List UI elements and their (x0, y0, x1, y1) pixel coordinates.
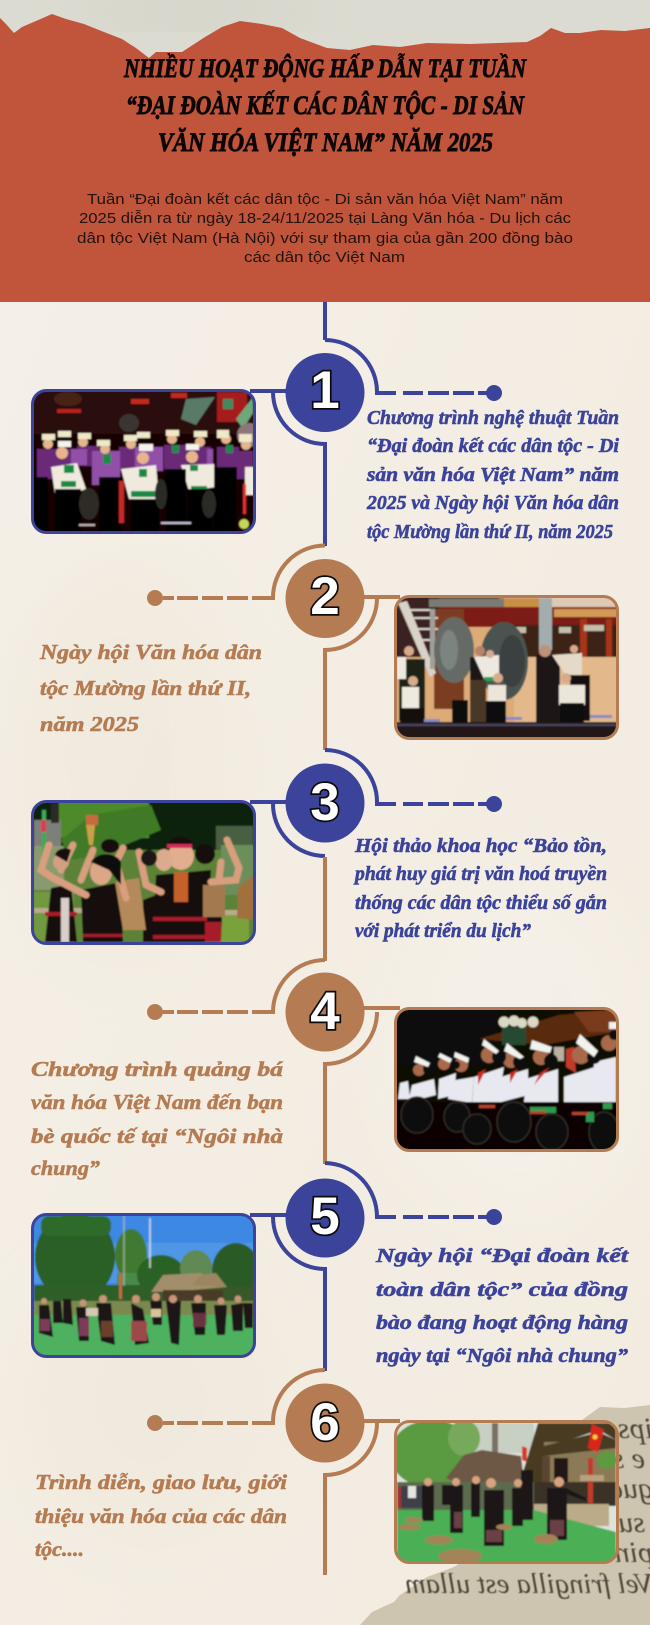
connector lines step 5 (250, 1163, 488, 1371)
text step 3: phát huy giá trị văn hoá truyền (353, 863, 607, 885)
text step 1: “Đại đoàn kết các dân tộc - Di (367, 435, 619, 457)
torn paper corner with mirrored text: e s (612, 1442, 645, 1475)
header band (0, 14, 650, 302)
text step 1: 2025 và Ngày hội Văn hóa dân (366, 492, 619, 514)
icon: dot step 6 (147, 1415, 163, 1431)
torn paper corner with mirrored text: sus (607, 1506, 645, 1539)
icon: dot step 3 (486, 796, 502, 812)
intro text: Tuần “Đại đoàn kết các dân tộc - Di sản văn hóa Việt Nam” năm (87, 191, 563, 208)
number circle 2: 2 (310, 567, 340, 626)
title: VĂN HÓA VIỆT NAM” NĂM 2025 (158, 128, 493, 157)
text step 3: với phát triển du lịch” (355, 920, 531, 942)
text step 4 (31, 1057, 284, 1180)
spine top (323, 302, 327, 340)
text step 2: năm 2025 (40, 712, 139, 736)
number circle 5: 5 (310, 1187, 340, 1246)
step 2 (39, 546, 619, 750)
photo 6: dancers by the stilt house (390, 1420, 619, 1565)
intro text: 2025 diễn ra từ ngày 18-24/11/2025 tại Làng Văn hóa - Du lịch các (79, 210, 572, 227)
number circle 2 (286, 559, 364, 638)
icon: dot step 5 (486, 1209, 502, 1225)
icon: dot step 2 (147, 590, 163, 606)
intro text: các dân tộc Việt Nam (244, 249, 405, 266)
connector lines step 3 (250, 750, 488, 856)
text step 4: chung” (31, 1156, 101, 1180)
connector lines step 4 (163, 960, 400, 1164)
step 1 (31, 340, 619, 546)
text step 6: tộc.... (35, 1537, 84, 1561)
text step 4: bè quốc tế tại “Ngôi nhà (31, 1124, 283, 1148)
number circle 1 (286, 353, 364, 432)
torn paper corner with mirrored text: Vel fringilla est ullam (405, 1569, 650, 1600)
step 4 (31, 960, 619, 1180)
step 6 (35, 1370, 619, 1575)
text step 3: Hội thảo khoa học “Bảo tồn, (354, 835, 607, 857)
text step 3: thống các dân tộc thiểu số gắn (355, 892, 607, 914)
connector lines step 6 (163, 1370, 400, 1575)
number circle 5 (286, 1178, 364, 1258)
step 3 (31, 750, 607, 961)
photo 4: women with gongs (394, 1007, 619, 1152)
text step 2: Ngày hội Văn hóa dân (39, 640, 262, 664)
title (123, 54, 527, 157)
text step 6: Trình diễn, giao lưu, giới (35, 1470, 287, 1494)
connector lines step 1 (250, 340, 488, 546)
step 5 (31, 1163, 630, 1371)
text step 4: Chương trình quảng bá (31, 1057, 284, 1081)
text step 1: Chương trình nghệ thuật Tuần (367, 407, 619, 429)
intro text: dân tộc Việt Nam (Hà Nội) với sự tham gia của gần 200 đồng bào (77, 230, 573, 247)
text step 2 (39, 640, 262, 736)
dancers (45, 870, 223, 942)
intro text (77, 191, 573, 266)
icon: dot step 4 (147, 1004, 163, 1020)
number circle 1: 1 (310, 361, 340, 420)
text step 5: ngày tại “Ngôi nhà chung” (376, 1345, 628, 1367)
text step 6 (35, 1470, 287, 1561)
back row (37, 445, 253, 479)
torn paper corner with mirrored text (360, 1405, 650, 1625)
text step 1: sản văn hóa Việt Nam” năm (366, 464, 619, 486)
number circle 3: 3 (310, 773, 340, 832)
number circle 4: 4 (310, 982, 340, 1041)
text step 1: tộc Mường lần thứ II, năm 2025 (367, 521, 613, 543)
front row (51, 463, 255, 499)
text step 4: văn hóa Việt Nam đến bạn (31, 1090, 283, 1114)
photo 3: dancers among trees (31, 800, 256, 946)
text step 5: toàn dân tộc” của đồng (376, 1279, 628, 1301)
text step 5 (375, 1245, 630, 1367)
spine after step 3 (323, 857, 327, 961)
title: “ĐẠI ĐOÀN KẾT CÁC DÂN TỘC - DI SẢN (126, 91, 525, 120)
photo 5: folk dance on the green (31, 1213, 260, 1358)
photo 1: stage performers (31, 389, 261, 534)
torn grey paper strip (0, 0, 650, 60)
text step 3 (353, 835, 607, 942)
number circle 3 (286, 764, 364, 842)
connector lines step 2 (163, 546, 400, 750)
text step 5: Ngày hội “Đại đoàn kết (375, 1245, 630, 1267)
text step 5: bào đang hoạt động hàng (376, 1312, 628, 1334)
number circle 6 (286, 1384, 364, 1462)
photo 2: gongs on stage (394, 595, 619, 740)
number circle 6: 6 (310, 1393, 340, 1452)
text step 2: tộc Mường lần thứ II, (40, 676, 251, 700)
number circle 4 (286, 972, 364, 1052)
title: NHIỀU HOẠT ĐỘNG HẤP DẪN TẠI TUẦN (123, 54, 527, 83)
text step 6: thiệu văn hóa của các dân (35, 1504, 287, 1528)
icon: dot step 1 (486, 385, 502, 401)
text step 1 (366, 407, 619, 543)
